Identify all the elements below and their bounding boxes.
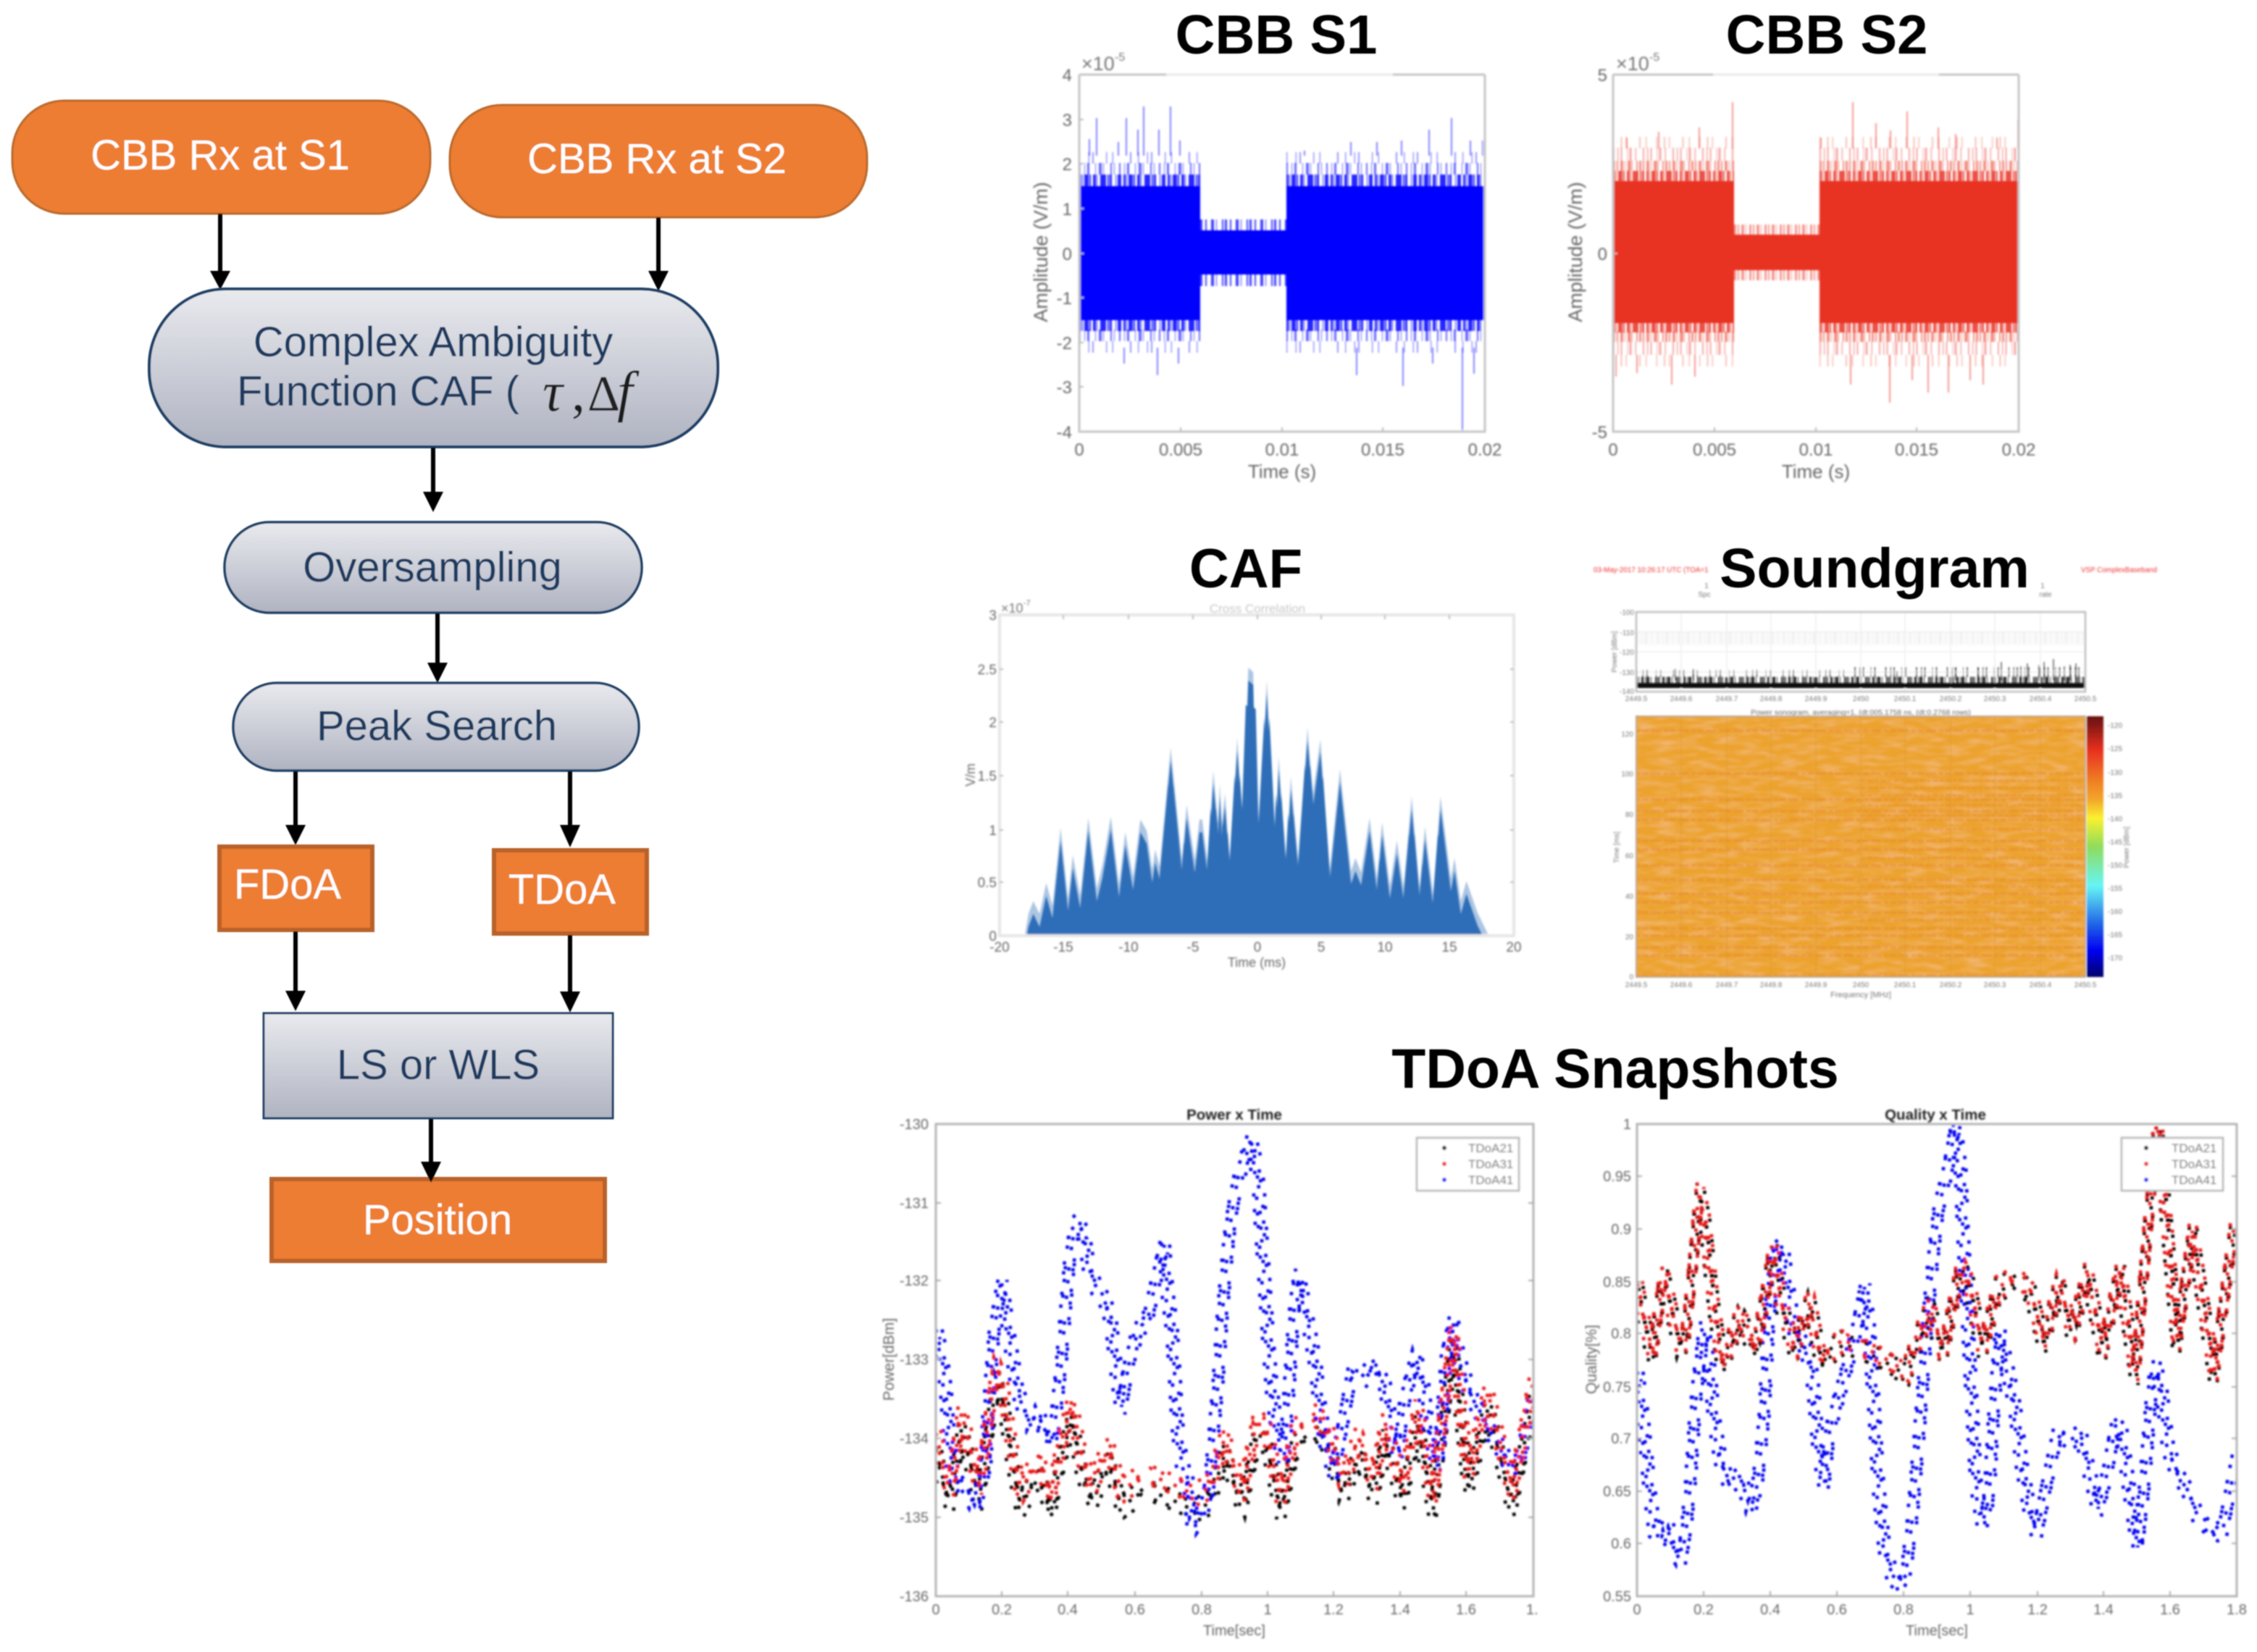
CAF tick labels bbox=[963, 599, 1522, 970]
Quality axes bbox=[1637, 1124, 2237, 1596]
S2 tick labels: ×10 bbox=[1616, 53, 1649, 75]
arrow: S2 to CAF bbox=[648, 217, 669, 291]
Quality labels: 0.7 bbox=[1611, 1431, 1631, 1447]
node: Complex Ambiguity Function: , bbox=[571, 362, 585, 423]
arrow: CAF to oversampling bbox=[423, 448, 443, 512]
CAF tick labels: 1 bbox=[989, 823, 997, 839]
CAF tick labels: 2 bbox=[989, 716, 997, 731]
node: Position bbox=[272, 1179, 605, 1261]
node: CBB Rx at S1: CBB Rx at S1 bbox=[91, 132, 350, 179]
Soundgram heat map labels bbox=[1613, 722, 2131, 999]
Soundgram heat map labels: 2449.8 bbox=[1760, 981, 1783, 989]
Power labels: -134 bbox=[900, 1431, 929, 1447]
Soundgram heat map labels: 2450.5 bbox=[2074, 981, 2097, 989]
Soundgram heat map labels: 2449.9 bbox=[1805, 981, 1827, 989]
S2 tick labels: 0.005 bbox=[1693, 440, 1736, 460]
S2 tick labels: Time (s) bbox=[1782, 461, 1850, 482]
CAF tick labels: -20 bbox=[989, 940, 1010, 955]
Soundgram heat map labels: 2450.1 bbox=[1894, 981, 1917, 989]
node: LS or WLS: LS or WLS bbox=[337, 1041, 540, 1089]
Power labels: 1.6 bbox=[1456, 1602, 1476, 1618]
Power labels: 0.2 bbox=[992, 1602, 1012, 1618]
arrow: peak search to FDoA bbox=[285, 771, 306, 845]
S1 tick labels: 0.01 bbox=[1265, 440, 1299, 460]
chart: CAF correlation bbox=[964, 598, 1523, 970]
Power labels: Power x Time bbox=[1186, 1107, 1282, 1123]
Soundgram spectrum tick labels: 2450.2 bbox=[1940, 695, 1962, 703]
heading: CBB S2: CBB S2 bbox=[1726, 4, 1927, 66]
Soundgram spectrum tick labels: 2449.5 bbox=[1625, 695, 1648, 703]
S2 tick labels: 0 bbox=[1608, 440, 1618, 460]
CAF tick labels: Time (ms) bbox=[1228, 955, 1286, 970]
node: Complex Ambiguity Function: Complex Ambiguity bbox=[254, 319, 613, 366]
CAF tick labels: 5 bbox=[1318, 940, 1325, 955]
CAF tick labels: 20 bbox=[1506, 940, 1522, 955]
Power labels: 0 bbox=[931, 1602, 940, 1618]
S2 tick labels: 5 bbox=[1598, 66, 1607, 85]
Quality labels: 1.6 bbox=[2160, 1602, 2180, 1618]
S2 tick labels: Amplitude (V/m) bbox=[1565, 182, 1586, 322]
S1 tick labels: Amplitude (V/m) bbox=[1030, 182, 1052, 322]
S2 tick labels: 0.015 bbox=[1895, 440, 1938, 460]
Soundgram header labels: 03-May-2017 10:26:17 UTC (TOA=1 bbox=[1594, 566, 1709, 574]
S1 tick labels: -5 bbox=[1115, 51, 1125, 64]
Soundgram heat map labels: Frequency [MHz] bbox=[1830, 991, 1891, 999]
Soundgram heat map labels: 20 bbox=[1625, 934, 1633, 942]
Power legend: TDoA31 bbox=[1468, 1157, 1513, 1171]
Power axes bbox=[936, 1124, 1533, 1596]
S2 axes bbox=[1613, 75, 2019, 432]
S2 tick labels: 0.02 bbox=[2002, 440, 2035, 460]
S1 tick labels: 0 bbox=[1063, 245, 1072, 264]
Soundgram spectrum tick labels: -110 bbox=[1620, 629, 1634, 637]
S1 tick labels: 3 bbox=[1063, 111, 1072, 130]
Soundgram spectrum tick labels bbox=[1611, 609, 2097, 717]
Power labels: 1. bbox=[1526, 1602, 1538, 1618]
Soundgram spectrum tick labels: 2450.4 bbox=[2030, 695, 2052, 703]
Quality labels: 0.6 bbox=[1611, 1536, 1631, 1552]
node: CBB Rx at S2 bbox=[450, 105, 867, 217]
node: FDoA: FDoA bbox=[234, 861, 341, 908]
CAF tick labels: 0 bbox=[1254, 940, 1261, 955]
CAF axes bbox=[1000, 615, 1514, 936]
Power labels: -131 bbox=[900, 1196, 929, 1212]
Soundgram heat map labels: 40 bbox=[1625, 893, 1633, 901]
Power labels: 1 bbox=[1263, 1602, 1272, 1618]
Soundgram heat map labels: -140 bbox=[2108, 815, 2122, 823]
Soundgram header labels bbox=[1594, 566, 2157, 599]
Power labels: 0.6 bbox=[1125, 1602, 1145, 1618]
S2 tick labels: -5 bbox=[1592, 423, 1607, 443]
node: Peak Search: Peak Search bbox=[317, 703, 557, 750]
Quality labels: 1.2 bbox=[2027, 1602, 2048, 1618]
Power legend bbox=[1417, 1138, 1519, 1191]
CAF tick labels: -7 bbox=[1023, 599, 1031, 608]
Power labels bbox=[881, 1107, 1538, 1639]
Soundgram heat map labels: 0 bbox=[1629, 973, 1633, 981]
S1 tick labels: -3 bbox=[1057, 378, 1072, 398]
Quality labels: 1.4 bbox=[2093, 1602, 2114, 1618]
S1 tick labels: 0.02 bbox=[1468, 440, 1502, 460]
chart: Soundgram bbox=[1594, 566, 2157, 999]
Soundgram heat map labels: 100 bbox=[1621, 771, 1633, 779]
CAF tick labels: Cross Correlation bbox=[1210, 602, 1305, 616]
Soundgram power spectrum bbox=[1636, 612, 2085, 692]
Soundgram spectrum tick labels: -100 bbox=[1620, 609, 1634, 617]
Quality labels: 0.55 bbox=[1603, 1589, 1631, 1605]
Quality labels: 0.65 bbox=[1603, 1484, 1631, 1500]
Quality scatter series bbox=[1632, 1115, 2241, 1593]
Power labels: 1.2 bbox=[1323, 1602, 1344, 1618]
chart: CBB S2 amplitude bbox=[1565, 51, 2035, 482]
S1 tick labels: -2 bbox=[1057, 334, 1072, 353]
Soundgram heat map bbox=[1636, 716, 2085, 977]
S1 tick labels: 0.005 bbox=[1159, 440, 1202, 460]
Soundgram heat map labels: Time [ms] bbox=[1613, 831, 1621, 863]
chart: CBB S1 amplitude bbox=[1030, 51, 1502, 482]
S1 tick labels bbox=[1030, 51, 1502, 482]
Soundgram header labels: Spc bbox=[1698, 591, 1711, 599]
Power labels: Time[sec] bbox=[1203, 1623, 1265, 1639]
Soundgram heat map labels: 120 bbox=[1621, 731, 1633, 739]
Power legend: TDoA41 bbox=[1468, 1173, 1513, 1187]
S2 tick labels: -5 bbox=[1649, 51, 1659, 64]
CAF tick labels: 15 bbox=[1441, 940, 1457, 955]
CAF tick labels: 1.5 bbox=[978, 769, 997, 784]
Quality legend: TDoA21 bbox=[2172, 1141, 2216, 1155]
S1 tick labels: 0 bbox=[1074, 440, 1084, 460]
CAF tick labels: ×10 bbox=[1001, 601, 1023, 616]
S1 tick labels: 4 bbox=[1063, 66, 1072, 85]
node: Oversampling: Oversampling bbox=[303, 544, 562, 591]
node: TDoA bbox=[494, 850, 647, 934]
Power legend: TDoA21 bbox=[1468, 1141, 1513, 1155]
Quality labels: 0.75 bbox=[1603, 1380, 1631, 1396]
node: LS or WLS bbox=[264, 1013, 613, 1118]
Soundgram heat map labels: -120 bbox=[2108, 722, 2122, 730]
chart: Quality x Time bbox=[1583, 1107, 2247, 1639]
Quality labels: Quality x Time bbox=[1885, 1107, 1986, 1123]
heading: CBB S1: CBB S1 bbox=[1176, 4, 1377, 66]
Quality legend: TDoA31 bbox=[2172, 1157, 2216, 1171]
Soundgram header labels: rate bbox=[2039, 591, 2052, 599]
arrow: oversampling to peak search bbox=[427, 613, 448, 683]
S1 tick labels: -4 bbox=[1057, 423, 1072, 443]
arrow: TDoA to LS bbox=[560, 935, 580, 1012]
Power labels: -135 bbox=[900, 1510, 929, 1526]
heading: TDoA Snapshots: TDoA Snapshots bbox=[1391, 1038, 1839, 1100]
Soundgram heat map labels: -155 bbox=[2108, 885, 2122, 893]
arrow: FDoA to LS bbox=[285, 931, 306, 1011]
Soundgram heat map labels: 80 bbox=[1625, 811, 1633, 819]
Quality labels: 0.6 bbox=[1827, 1602, 1847, 1618]
arrow: LS to position bbox=[421, 1119, 441, 1183]
Soundgram spectrum tick labels: -130 bbox=[1620, 669, 1634, 677]
Power labels: Power[dBm] bbox=[881, 1318, 897, 1401]
Quality labels: 1 bbox=[1966, 1602, 1975, 1618]
Soundgram spectrum tick labels: Power [dBm] bbox=[1611, 631, 1619, 673]
CAF tick labels: 3 bbox=[989, 608, 997, 624]
S2 tick labels bbox=[1565, 51, 2035, 482]
node: CBB Rx at S2: CBB Rx at S2 bbox=[527, 135, 787, 183]
S2 tick labels: 0 bbox=[1598, 245, 1607, 264]
Quality legend: TDoA41 bbox=[2172, 1173, 2216, 1187]
Quality labels: 0.4 bbox=[1760, 1602, 1780, 1618]
Quality labels: 0.85 bbox=[1603, 1275, 1631, 1291]
Soundgram heat map labels: 2449.7 bbox=[1716, 981, 1738, 989]
node: FDoA bbox=[219, 847, 372, 930]
CAF tick labels: 10 bbox=[1377, 940, 1393, 955]
CAF tick labels: 0 bbox=[989, 929, 997, 944]
Soundgram heat map labels: 60 bbox=[1625, 852, 1633, 860]
node: Complex Ambiguity Function: Function CAF ( bbox=[237, 368, 519, 415]
CAF tick labels: V/m bbox=[963, 763, 978, 787]
Soundgram heat map labels: -125 bbox=[2108, 745, 2122, 753]
S1 axes bbox=[1079, 75, 1485, 432]
Soundgram spectrum tick labels: 2450 bbox=[1853, 695, 1869, 703]
Power scatter series bbox=[931, 1133, 1538, 1534]
Soundgram heat map labels: 2449.6 bbox=[1670, 981, 1693, 989]
Soundgram heat map labels: -130 bbox=[2108, 769, 2122, 777]
Soundgram spectrum tick labels: 2449.7 bbox=[1716, 695, 1738, 703]
Quality labels bbox=[1583, 1107, 2247, 1639]
CAF tick labels: 0.5 bbox=[978, 876, 997, 891]
S1 tick labels: ×10 bbox=[1081, 53, 1115, 75]
Soundgram spectrum tick labels: 2450.5 bbox=[2074, 695, 2097, 703]
Power labels: -132 bbox=[900, 1273, 929, 1289]
CAF tick labels: 2.5 bbox=[978, 663, 997, 678]
node: Complex Ambiguity Function: f bbox=[617, 360, 640, 423]
Soundgram spectrum tick labels: 2450.1 bbox=[1894, 695, 1917, 703]
Soundgram spectrum tick labels: 2449.9 bbox=[1805, 695, 1827, 703]
Quality labels: 0.9 bbox=[1611, 1222, 1631, 1238]
Soundgram heat map labels: -170 bbox=[2108, 955, 2122, 963]
Soundgram heat map labels: 2450.4 bbox=[2030, 981, 2052, 989]
Soundgram spectrum tick labels: 2449.6 bbox=[1670, 695, 1693, 703]
node: Complex Ambiguity Function: τ bbox=[543, 360, 565, 423]
Soundgram heat map labels: 2450 bbox=[1853, 981, 1869, 989]
Soundgram spectrum tick labels: -140 bbox=[1620, 688, 1634, 696]
Soundgram heat map labels: -165 bbox=[2108, 931, 2122, 939]
S1 tick labels: Time (s) bbox=[1248, 461, 1316, 482]
Soundgram colour bar bbox=[2087, 716, 2103, 977]
heading: CAF: CAF bbox=[1189, 538, 1302, 600]
Soundgram header labels: VSP ComplexBaseband bbox=[2081, 566, 2157, 574]
node: CBB Rx at S1 bbox=[12, 101, 430, 214]
Quality labels: Time[sec] bbox=[1906, 1623, 1968, 1639]
Soundgram spectrum tick labels: -120 bbox=[1620, 649, 1634, 657]
S1 tick labels: 1 bbox=[1063, 200, 1072, 219]
Soundgram header labels: 1 bbox=[2040, 582, 2045, 590]
Soundgram heat map labels: 2450.2 bbox=[1940, 981, 1962, 989]
Soundgram spectrum tick labels: 2449.8 bbox=[1760, 695, 1783, 703]
CAF tick labels: -15 bbox=[1053, 940, 1073, 955]
Quality labels: Quality[%] bbox=[1583, 1325, 1600, 1394]
S1 tick labels: 2 bbox=[1063, 155, 1072, 175]
S1 signal bands bbox=[1079, 106, 1485, 432]
Soundgram heat map labels: -145 bbox=[2108, 839, 2122, 847]
Soundgram heat map labels: -160 bbox=[2108, 908, 2122, 916]
Quality labels: 0.95 bbox=[1603, 1169, 1631, 1185]
Power labels: -136 bbox=[900, 1589, 929, 1605]
CAF filled envelope bbox=[1024, 668, 1488, 936]
Quality legend bbox=[2122, 1138, 2223, 1191]
node: Complex Ambiguity Function bbox=[149, 289, 718, 447]
S1 tick labels: 0.015 bbox=[1361, 440, 1404, 460]
Soundgram heat map labels: -150 bbox=[2108, 862, 2122, 870]
Soundgram heat map labels: 2449.5 bbox=[1625, 981, 1648, 989]
panel: flowchart bbox=[12, 101, 867, 1261]
Soundgram spectrum tick labels: 2450.3 bbox=[1984, 695, 2006, 703]
Quality labels: 0.2 bbox=[1693, 1602, 1714, 1618]
arrow: S1 to CAF bbox=[210, 214, 230, 290]
Soundgram heat map labels: 2450.3 bbox=[1984, 981, 2006, 989]
Power labels: 0.4 bbox=[1058, 1602, 1078, 1618]
node: Position: Position bbox=[363, 1196, 512, 1244]
Soundgram heat map labels: -135 bbox=[2108, 792, 2122, 800]
chart: Power x Time bbox=[881, 1107, 1538, 1639]
Quality labels: 0.8 bbox=[1611, 1326, 1631, 1342]
node: Peak Search bbox=[233, 683, 639, 771]
Quality labels: 1.8 bbox=[2227, 1602, 2247, 1618]
Quality labels: 1 bbox=[1623, 1117, 1631, 1133]
node: Oversampling bbox=[225, 522, 642, 613]
S2 tick labels: 0.01 bbox=[1799, 440, 1833, 460]
Soundgram heat map labels: Power [dBm] bbox=[2123, 826, 2131, 868]
Power labels: -130 bbox=[900, 1117, 929, 1133]
arrow: peak search to TDoA bbox=[560, 771, 580, 847]
Soundgram spectrum tick labels: Power sonogram, averaging=1, (dt:005.1758 ns, (dt:0.2768 rows) bbox=[1751, 708, 1971, 717]
Power labels: 1.4 bbox=[1390, 1602, 1410, 1618]
CAF tick labels: -10 bbox=[1118, 940, 1139, 955]
Soundgram header labels: 1 bbox=[1704, 582, 1709, 590]
CAF tick labels: -5 bbox=[1187, 940, 1199, 955]
node: Complex Ambiguity Function: Δ bbox=[587, 366, 620, 422]
Quality labels: 0.8 bbox=[1893, 1602, 1914, 1618]
S1 tick labels: -1 bbox=[1057, 289, 1072, 309]
S2 signal bands bbox=[1613, 102, 2019, 403]
Power labels: -133 bbox=[900, 1352, 929, 1368]
heading: Soundgram: Soundgram bbox=[1720, 537, 2030, 600]
Power labels: 0.8 bbox=[1192, 1602, 1212, 1618]
Quality labels: 0 bbox=[1633, 1602, 1641, 1618]
node: TDoA: TDoA bbox=[508, 866, 616, 913]
